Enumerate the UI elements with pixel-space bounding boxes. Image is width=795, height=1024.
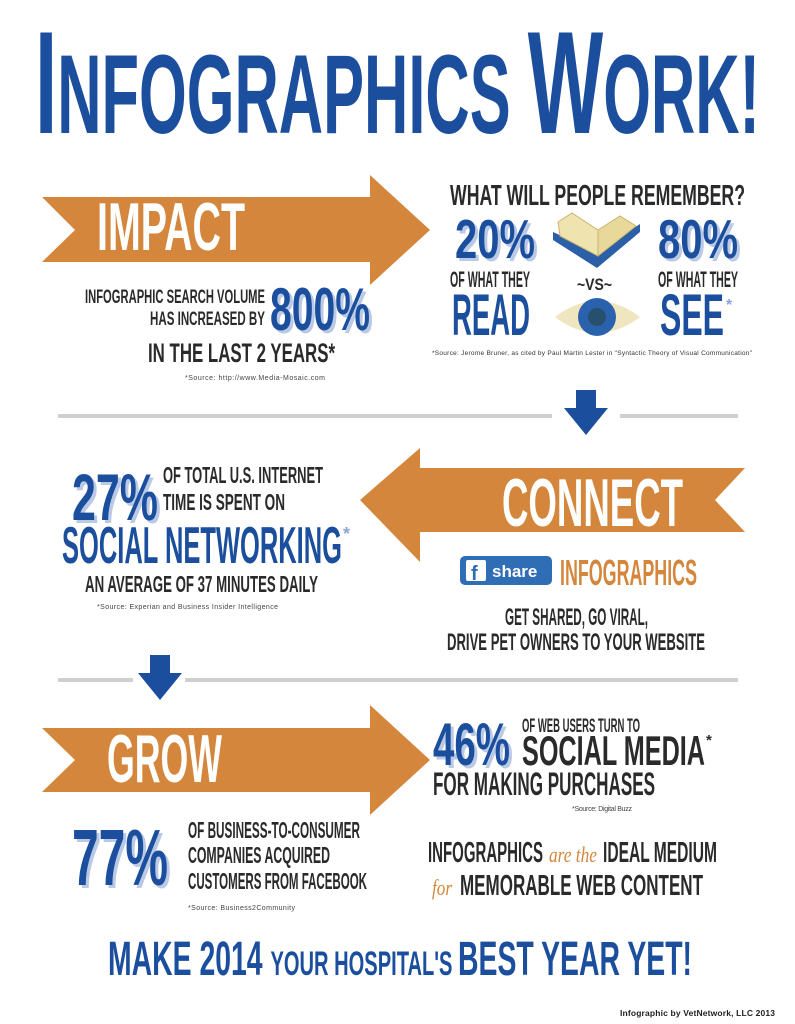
text block: get shared: GET SHARED, GO VIRAL,: [505, 604, 648, 631]
text block: social networking: OF TOTAL U.S. INTERNET: [163, 462, 323, 488]
panel: what will people remember: READ: [452, 283, 530, 348]
text block: get shared: [447, 552, 705, 656]
panel: what will people remember: 20%: [458, 211, 538, 273]
text block: search volume: IN THE LAST 2 YEARS*: [148, 338, 335, 368]
text block: facebook customers: OF BUSINESS-TO-CONSUMER: [188, 817, 360, 843]
panel: what will people remember: 80%: [661, 211, 741, 273]
text block: facebook customers: [72, 813, 367, 912]
icon: eye: [555, 298, 640, 336]
text block: social networking: [62, 460, 350, 611]
text block: social networking: 27%: [75, 463, 161, 537]
text block: social networking: *Source: Experian and Business Insider Intelligence: [97, 604, 278, 611]
panel: what will people remember: OF WHAT THEY: [450, 267, 530, 292]
text block: search volume: *Source: http://www.Media-Mosaic.com: [185, 375, 325, 382]
text block: social networking: 27%: [72, 460, 158, 534]
arrow: impact: [42, 175, 430, 285]
text block: ideal medium: [428, 837, 717, 902]
text block: ideal medium: are the: [549, 842, 597, 867]
arrow: down 1: [564, 390, 608, 435]
panel: what will people remember: [432, 180, 753, 357]
panel: what will people remember: *Source: Jerome Bruner, as cited by Paul Martin Lester in "Syntactic Theory of Visual Communication": [432, 350, 753, 357]
text block: social media purchases: *Source: Digital Buzz: [572, 806, 632, 813]
text block: facebook customers: 77%: [72, 813, 168, 902]
text block: social networking: SOCIAL NETWORKING: [62, 517, 342, 575]
panel: what will people remember: ~VS~: [577, 275, 612, 294]
text block: social networking: *: [343, 524, 350, 544]
heading: grow: GROW: [107, 721, 222, 797]
arrow: grow: [42, 705, 430, 815]
panel: what will people remember: *: [726, 297, 733, 314]
text block: facebook customers: COMPANIES ACQUIRED: [188, 842, 330, 868]
text block: social networking: TIME IS SPENT ON: [163, 489, 285, 515]
text block: search volume: [85, 276, 373, 382]
text block: search volume: 800%: [273, 279, 373, 346]
text block: search volume: 800%: [270, 276, 370, 343]
text block: facebook customers: 77%: [75, 816, 171, 905]
text block: facebook customers: *Source: Business2Community: [188, 905, 296, 912]
text block: search volume: HAS INCREASED BY: [150, 309, 265, 330]
icon: facebook share: [460, 556, 552, 585]
arrow: connect: [360, 448, 745, 562]
text block: social media purchases: [433, 711, 712, 813]
text block: facebook customers: CUSTOMERS FROM FACEBOOK: [188, 868, 367, 894]
icon: book: [553, 213, 640, 268]
text block: ideal medium: INFOGRAPHICS: [428, 837, 543, 869]
text block: ideal medium: for: [432, 875, 452, 900]
panel: what will people remember: 20%: [455, 208, 535, 270]
panel: what will people remember: SEE: [660, 283, 724, 348]
icon: facebook share: share: [492, 562, 537, 581]
icon: facebook share: f: [471, 563, 478, 585]
credit: Infographic by VetNetwork, LLC 2013: [620, 1008, 775, 1018]
arrow: down 2: [138, 655, 182, 700]
text block: social media purchases: OF WEB USERS TURN TO: [522, 716, 640, 737]
text block: social media purchases: 46%: [433, 711, 510, 778]
text block: social media purchases: 46%: [436, 714, 513, 781]
heading: impact: IMPACT: [97, 189, 245, 265]
panel: what will people remember: 80%: [658, 208, 738, 270]
text block: social networking: AN AVERAGE OF 37 MINUTES DAILY: [85, 571, 318, 597]
text block: social media purchases: *: [706, 732, 712, 749]
text block: search volume: INFOGRAPHIC SEARCH VOLUME: [85, 287, 265, 308]
